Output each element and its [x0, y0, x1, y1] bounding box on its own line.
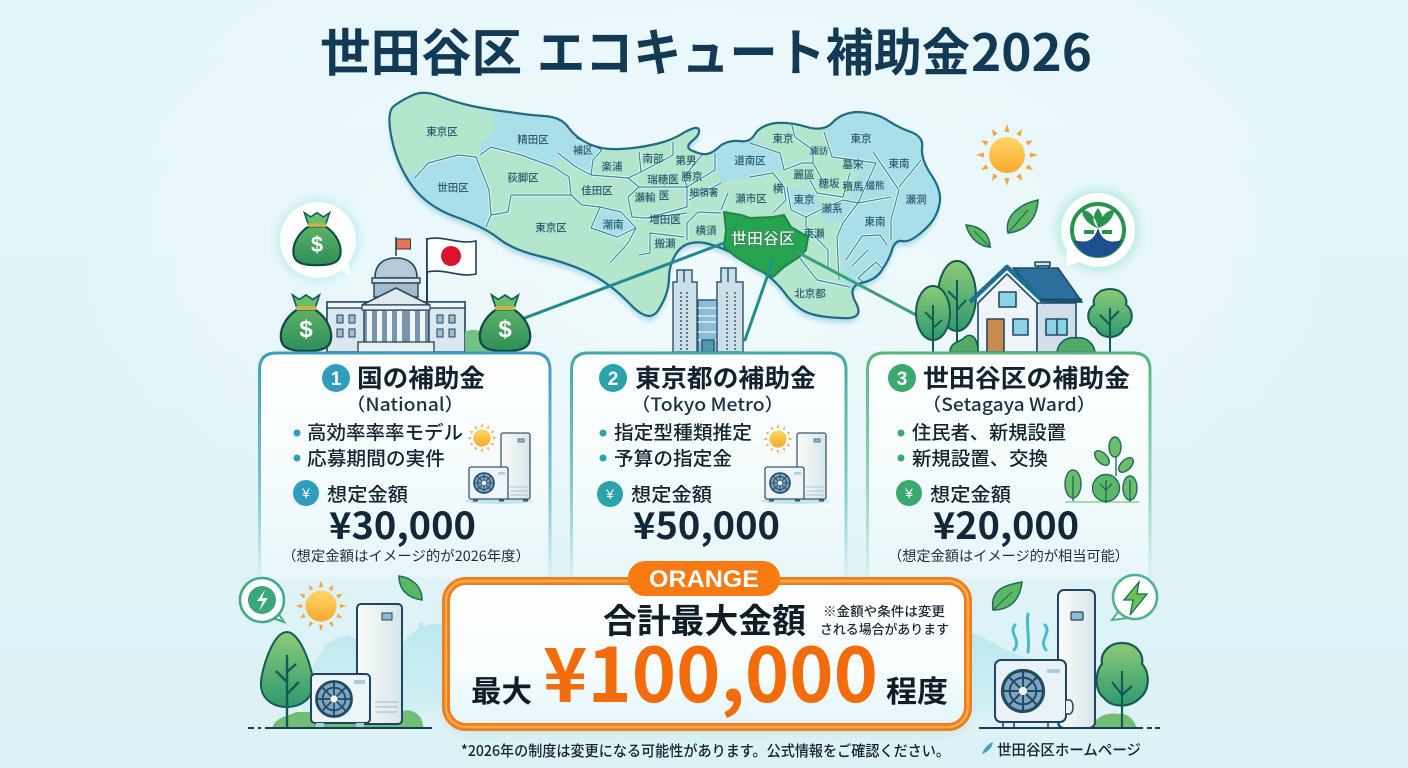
map ward labels: 医: [659, 188, 670, 203]
card frame: [868, 353, 1150, 578]
box frame: [446, 581, 968, 727]
number badge: [888, 364, 916, 392]
map ward labels: [426, 124, 926, 301]
map ward labels: 増田医: [649, 212, 681, 227]
map ward labels: 東南: [864, 214, 886, 229]
illustration: right heat pump unit: [965, 575, 1160, 728]
amount: ¥20,000: [933, 496, 1079, 550]
panel: national subsidy: [260, 353, 550, 578]
bullet list: 予算の指定金: [614, 444, 732, 471]
map blue wards: [400, 105, 950, 290]
map ward labels: 東京区: [535, 220, 567, 235]
panel: maximum total amount: [444, 561, 970, 734]
icon: shrub beside the building: [465, 330, 496, 352]
ground line: [248, 727, 432, 729]
bullet list: 指定型種類推定: [614, 418, 752, 445]
map ward labels: 荻脚区: [507, 170, 539, 185]
map ward labels: 東京: [850, 131, 872, 146]
icon: money bag left: $: [299, 316, 313, 343]
card frame: [260, 353, 550, 578]
footnote: （想定金額はイメージ的が2026年度）: [282, 546, 530, 566]
ground line: [979, 727, 1160, 729]
note: ※金額や条件は変更: [823, 601, 945, 620]
map ward labels: 瑞穂医: [647, 172, 679, 187]
map ward labels: 佳田区: [581, 183, 613, 198]
dome: [375, 258, 417, 278]
map ward labels: 瀬系: [822, 201, 843, 216]
map ward labels: 東京区: [426, 124, 458, 139]
map ward labels: 撮熊: [865, 178, 885, 192]
title: 2026: [971, 12, 1092, 86]
panel: Tokyo metropolitan subsidy: [572, 353, 846, 578]
yen badge: [896, 480, 922, 506]
icon: money bag left: [281, 295, 331, 351]
map ward labels: 穂坂: [818, 176, 840, 191]
bush: [272, 710, 423, 728]
note: される場合があります: [820, 619, 949, 638]
yen badge: [597, 481, 623, 507]
english subtitle: （Setagaya Ward）: [922, 391, 1096, 417]
icon: leaf: [399, 576, 422, 600]
small flag: [396, 237, 410, 256]
map ward labels: 麗區: [794, 167, 815, 182]
icon: house: [970, 262, 1082, 352]
english subtitle: （Tokyo Metro）: [631, 391, 784, 417]
map ward boundaries: [415, 122, 921, 287]
connector lines from Setagaya to the three levels: [522, 243, 918, 340]
heat waves: [1013, 614, 1047, 652]
amount: ¥50,000: [633, 496, 780, 550]
footer link to Setagaya homepage: 世田谷区ホームページ: [997, 739, 1141, 760]
card heading: 国の補助金: [357, 359, 485, 395]
map ward labels: 細領署: [690, 185, 718, 199]
box heading: 合計最大金額: [603, 594, 806, 643]
map ward labels: 墓宋: [842, 157, 864, 172]
map ward labels: 横須: [696, 223, 717, 238]
card heading: 東京都の補助金: [635, 359, 816, 395]
icon: leaf small: [966, 225, 991, 248]
tank: [357, 604, 402, 724]
bullet list: 応募期間の実件: [307, 444, 445, 471]
outdoor unit: [995, 660, 1073, 728]
prefix: 最大: [471, 667, 532, 711]
icon: eco speech bubble: [240, 578, 284, 622]
map ward labels: 東京: [794, 192, 814, 207]
tree: [261, 632, 313, 728]
map ward labels: 勝京: [682, 169, 702, 184]
icon: money bag right: [480, 295, 530, 351]
yen badge: [293, 480, 319, 506]
title: エコキュート補助金: [537, 12, 970, 86]
icon: heat pump with sun: [761, 424, 829, 504]
amount label: 想定金額: [327, 480, 408, 507]
yen badge: ¥: [904, 485, 913, 501]
suffix: 程度: [886, 667, 948, 711]
number badge: [322, 364, 350, 392]
icon: leaf: [1007, 200, 1038, 233]
total amount: ¥100,000: [543, 615, 878, 724]
map ward labels: 東京: [772, 131, 794, 146]
number badge: [599, 364, 627, 392]
icon: national diet building with flags: [327, 237, 476, 352]
icon: sun top right: [976, 124, 1038, 186]
map base landmass: [389, 93, 940, 318]
footnote: （想定金額はイメージ的が相当可能）: [888, 546, 1129, 566]
icon: money bag speech bubble: $: [311, 232, 323, 257]
map ward labels: 世田区: [437, 180, 469, 195]
title: 世田谷区: [320, 12, 522, 86]
icon: right tree and bushes at the house: [950, 289, 1132, 352]
map ward labels: 潮南: [602, 217, 624, 232]
map ward labels: 楽浦: [602, 159, 623, 174]
map of Tokyo: [389, 93, 950, 318]
map ward labels: 瀬輸: [634, 190, 656, 205]
tank: [1058, 590, 1095, 728]
bullet list: [600, 418, 752, 471]
map ward labels: 北京都: [794, 286, 826, 301]
icon: heat pump with sun: [465, 423, 533, 504]
number badge: 2: [608, 369, 618, 390]
map coastline: [389, 93, 940, 318]
illustration: left heat pump unit: [240, 576, 448, 728]
icon: money bag speech bubble: [277, 199, 359, 281]
box glow: [444, 584, 970, 734]
amount label: 想定金額: [631, 480, 712, 507]
portico: [364, 305, 429, 345]
map ward labels: 諏訪: [810, 144, 828, 157]
yen badge: ¥: [301, 485, 310, 501]
pale cloud: [300, 624, 448, 724]
bullet list: [294, 418, 463, 471]
map ward labels: 道南区: [734, 153, 766, 168]
map ward labels: 第男: [676, 153, 696, 168]
map ward labels: 東南: [888, 156, 910, 171]
card heading: 世田谷区の補助金: [923, 359, 1130, 395]
badge: [628, 561, 780, 596]
icon: lightning speech bubble: [1112, 575, 1157, 620]
japanese flag: [427, 238, 476, 302]
map ward labels: 横: [773, 181, 784, 196]
map ward labels: 瀬市区: [735, 191, 767, 206]
amount label: 想定金額: [930, 480, 1011, 507]
map ward labels: 東瀬: [804, 226, 825, 241]
icon: tokyo metropolitan government building: [673, 268, 743, 352]
icon: leaf: [993, 582, 1022, 610]
pale cloud: [965, 632, 1040, 724]
map ward labels: 積馬: [842, 179, 864, 194]
footer disclaimer: *2026年の制度は変更になる可能性があります。公式情報をご確認ください。: [461, 740, 950, 761]
bush: [1090, 714, 1137, 728]
icon: plants: [1065, 437, 1139, 503]
map ward labels: 補区: [573, 142, 593, 157]
highlighted Setagaya ward: [724, 212, 808, 277]
number badge: 3: [897, 369, 907, 390]
small dot: [418, 622, 424, 628]
english subtitle: （National）: [346, 391, 464, 417]
icon: sun: [296, 581, 346, 631]
bullet list: 住民者、新規設置: [912, 418, 1066, 445]
note: [820, 601, 949, 638]
highlighted Setagaya ward: 世田谷区: [731, 225, 795, 249]
bullet list: [898, 418, 1066, 471]
icon: trees behind house left: [916, 261, 976, 352]
title: [320, 12, 1092, 86]
icon: money bag right: $: [498, 316, 512, 343]
bullet list: 新規設置、交換: [912, 444, 1048, 471]
map ward labels: 精田区: [517, 132, 549, 147]
amount: ¥30,000: [329, 496, 476, 550]
icon: Setagaya emblem speech bubble: [1057, 189, 1139, 271]
bullet list: 高効率率率モデル: [307, 418, 463, 445]
number badge: 1: [331, 369, 342, 390]
map ward labels: 瀬洞: [906, 192, 926, 207]
map ward labels: 搬瀬: [654, 236, 676, 251]
outdoor unit: [311, 674, 370, 727]
map ward labels: 南部: [642, 151, 664, 166]
badge: ORANGE: [649, 566, 759, 593]
yen badge: ¥: [605, 486, 614, 502]
wings: [327, 302, 465, 352]
card frame: [572, 353, 846, 578]
tree: [1097, 643, 1148, 728]
panel: Setagaya ward subsidy: [868, 353, 1150, 578]
